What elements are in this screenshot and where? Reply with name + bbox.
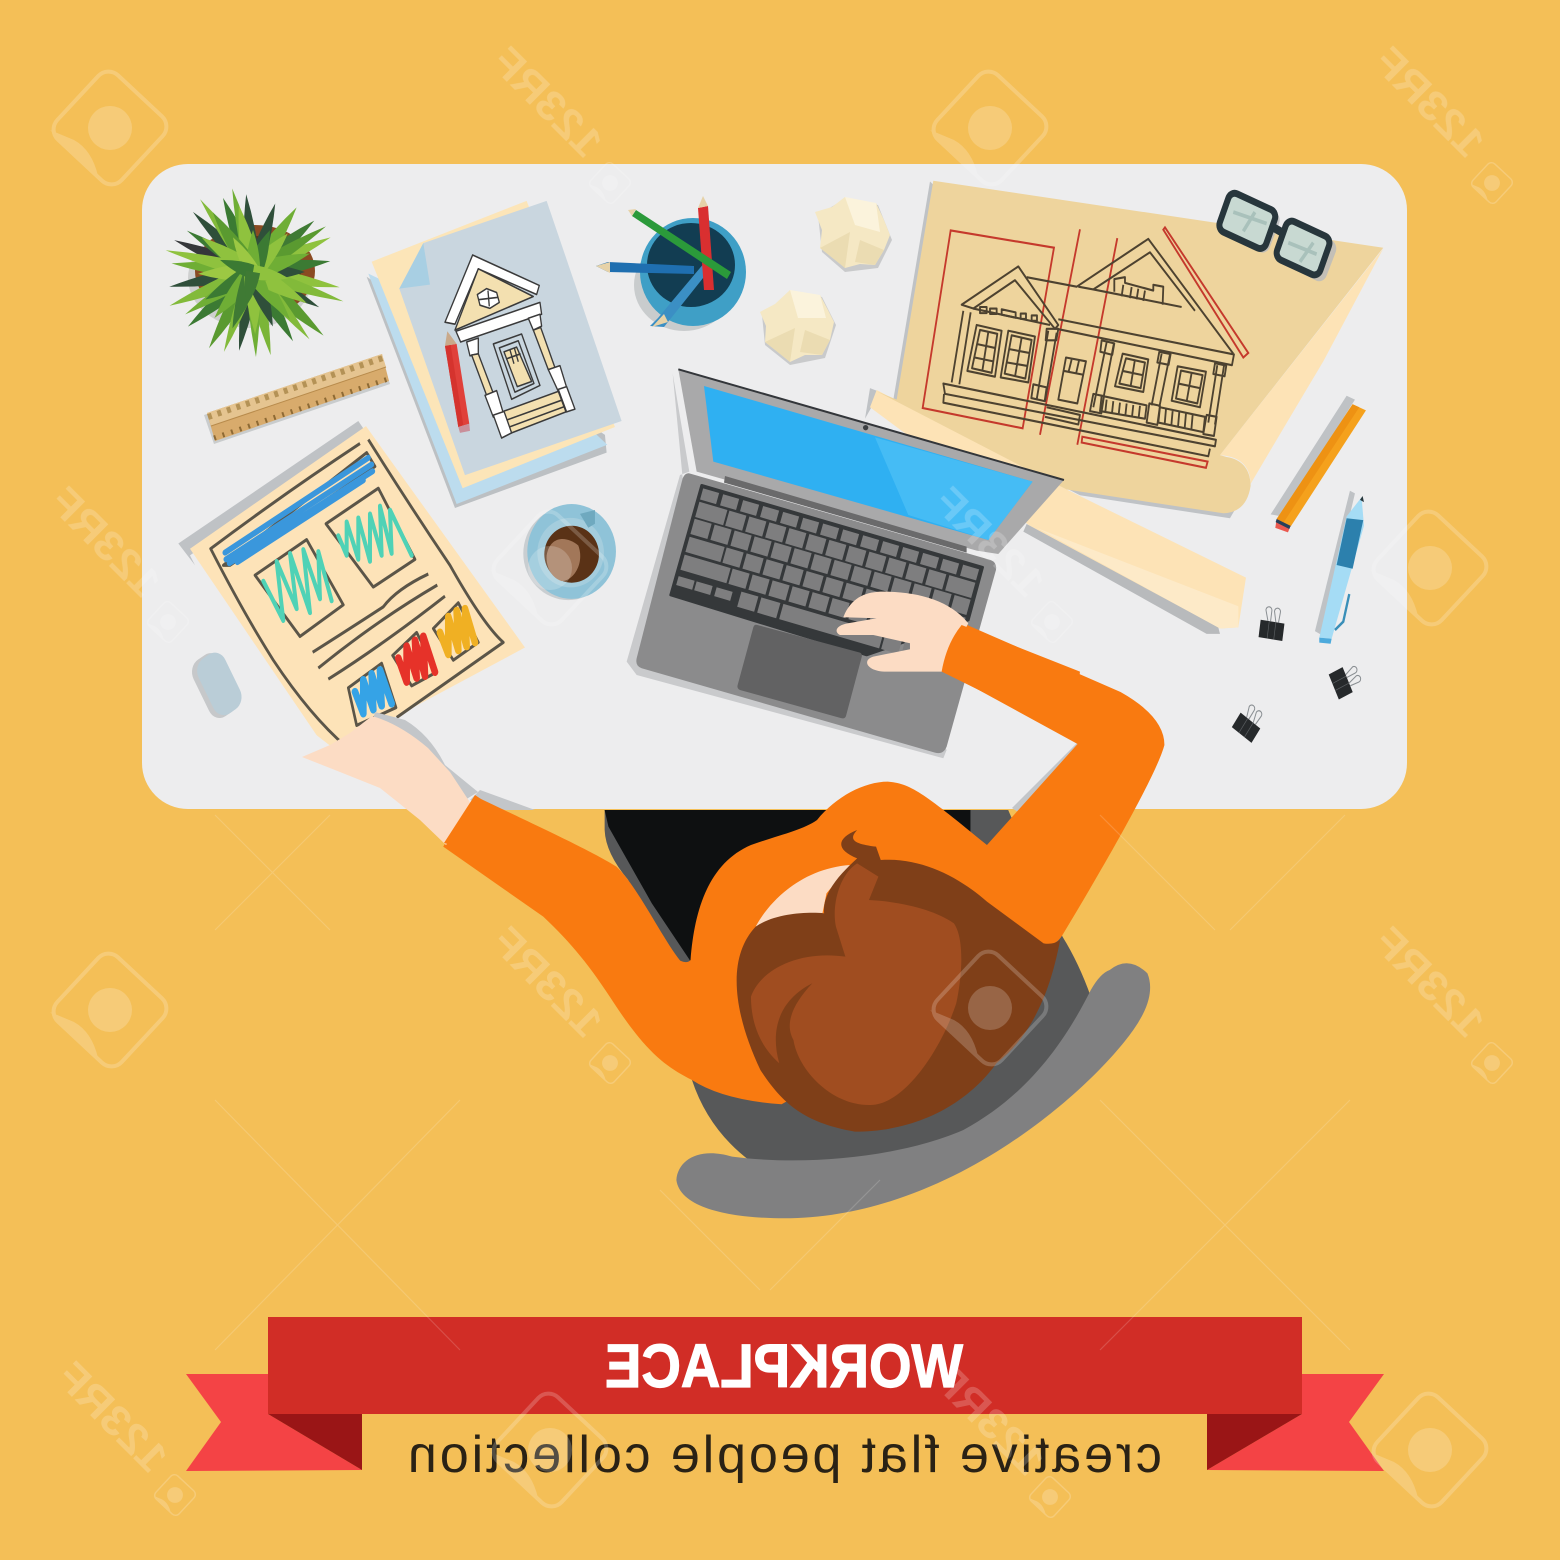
small house drawing <box>445 255 575 438</box>
keyboard <box>671 485 983 655</box>
eraser <box>188 647 246 723</box>
paper stack with house sketch <box>367 201 622 508</box>
watermarks: 123RF <box>1365 38 1494 166</box>
person torso: black top <box>605 810 970 963</box>
red guide lines <box>923 227 1248 468</box>
person: orange sweater <box>443 625 1164 1132</box>
pen <box>1315 491 1364 644</box>
neck <box>756 865 850 927</box>
binder clips <box>1232 606 1364 743</box>
cream roll <box>870 390 1246 628</box>
coffee cup <box>523 504 616 600</box>
sketch paper <box>178 421 525 761</box>
watermarks: 123RF <box>41 478 170 606</box>
shadow <box>627 373 947 758</box>
hair <box>737 830 1060 1132</box>
screen <box>704 386 1033 540</box>
ribbon banner <box>186 1317 1384 1471</box>
crumpled papers <box>760 197 892 365</box>
hand on keyboard <box>837 592 1080 737</box>
orange pencil <box>1271 396 1366 532</box>
watermarks: 123RF <box>483 38 612 166</box>
watermarks: 123RF <box>925 478 1054 606</box>
trackpad <box>737 625 862 718</box>
chair seat <box>605 810 1091 1167</box>
pen cup <box>596 196 746 331</box>
laptop <box>627 369 1064 758</box>
grey-blue sheet <box>399 201 622 475</box>
blueprint paper <box>865 181 1383 634</box>
watermarks: 123RF <box>1365 918 1494 1046</box>
base <box>636 473 996 753</box>
watermarks: 123RF <box>925 1356 1054 1484</box>
tan sheet <box>877 181 1383 513</box>
red pencil <box>445 344 469 427</box>
pencils <box>596 262 694 274</box>
chair back <box>676 963 1150 1218</box>
plant <box>164 187 346 357</box>
person: sleeve shadow on desk <box>470 738 1090 812</box>
desk <box>142 164 1407 809</box>
house drawing <box>943 239 1234 456</box>
subtitle: creative flat people collection <box>408 1426 1162 1484</box>
hand on paper <box>302 712 500 850</box>
watermarks: 123RF <box>48 1353 177 1481</box>
lid <box>678 369 1064 554</box>
curl <box>1220 248 1383 484</box>
watermarks: 123RF <box>483 918 612 1046</box>
ruler <box>204 354 390 444</box>
heading: WORKPLACE <box>605 1332 963 1400</box>
glasses <box>1217 191 1339 284</box>
